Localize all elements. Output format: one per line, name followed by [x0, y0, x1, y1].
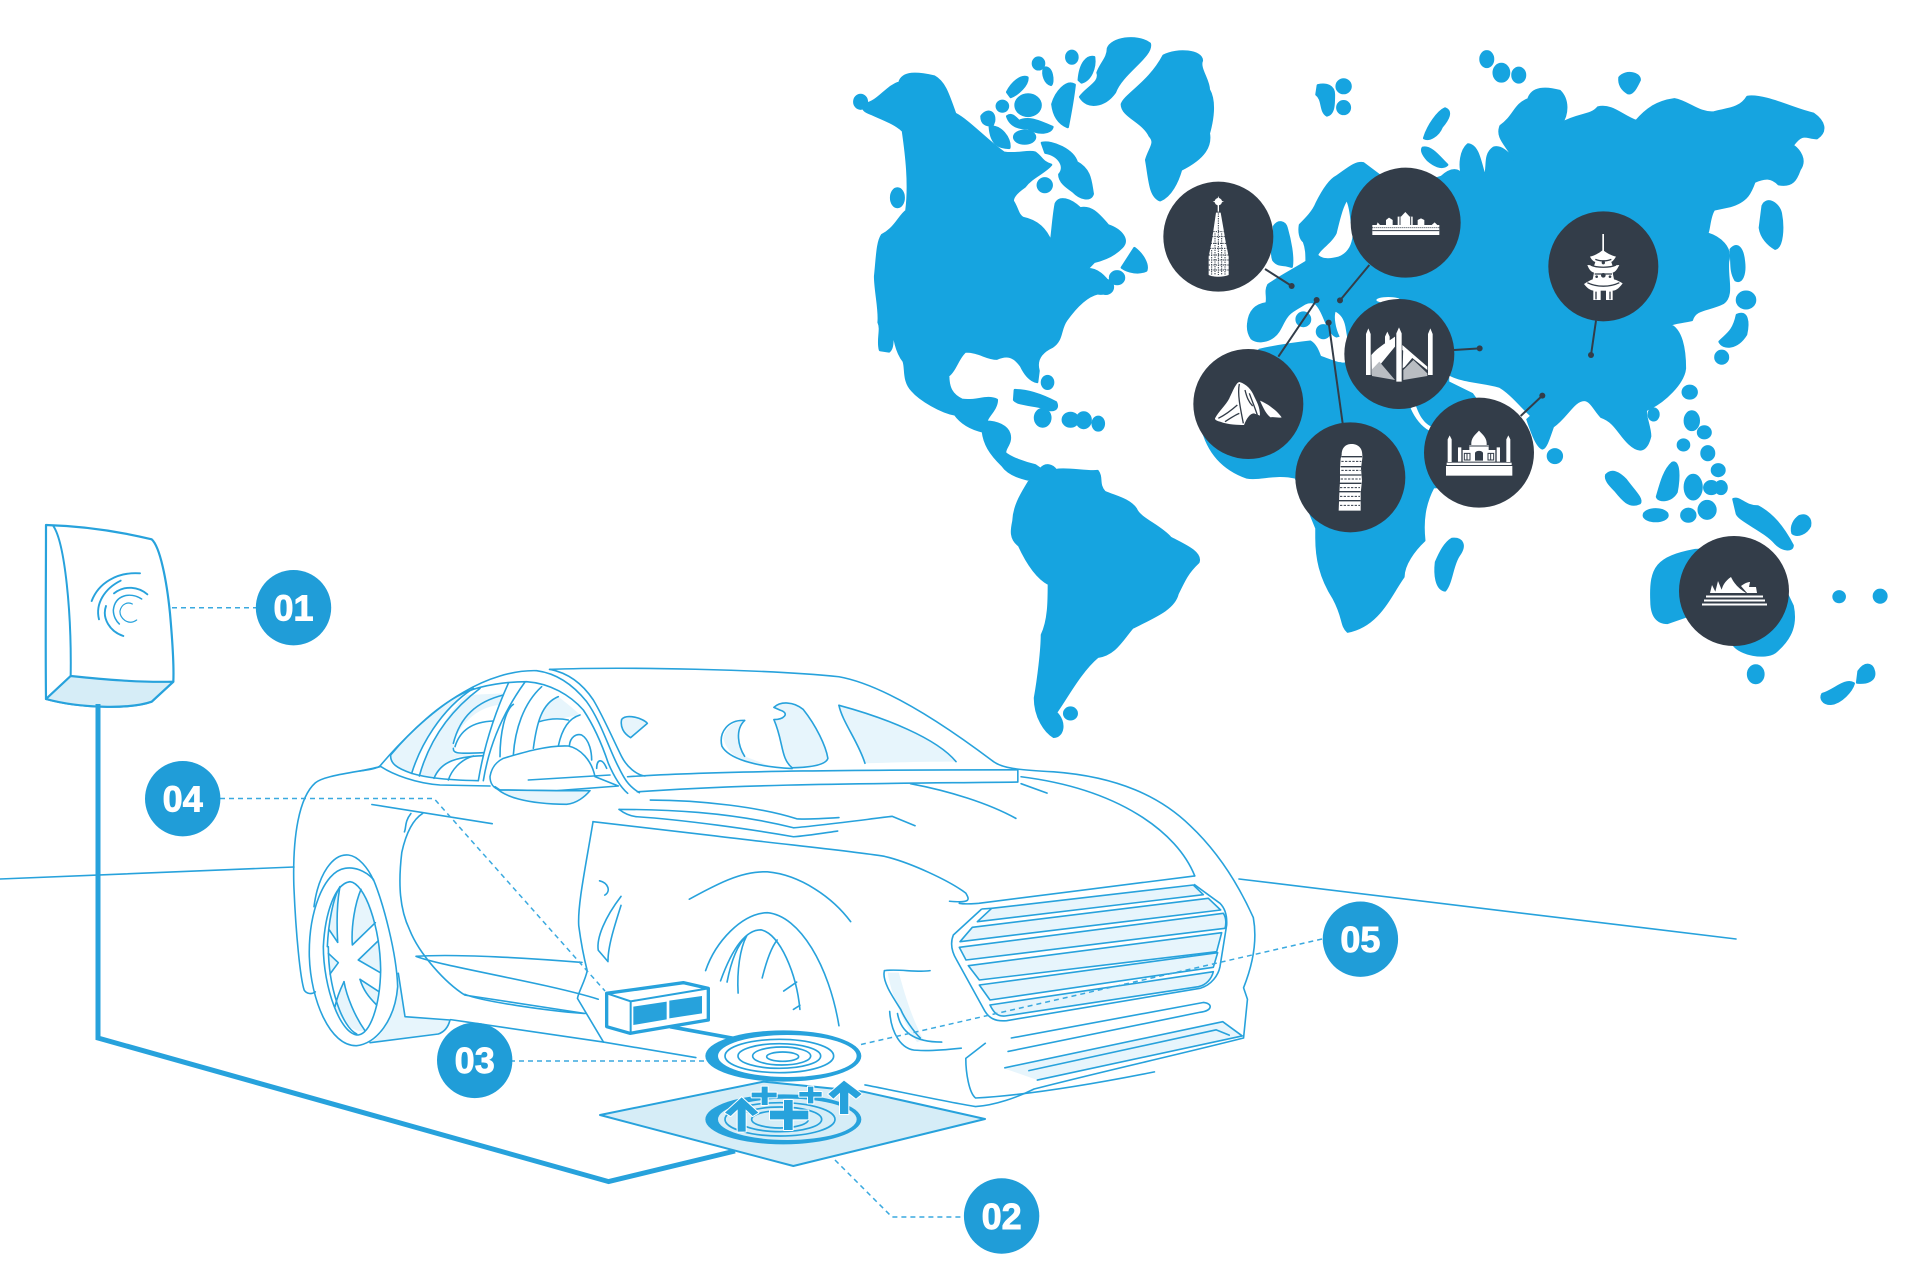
badge 05: 05	[1340, 919, 1380, 960]
signal waves	[92, 573, 147, 636]
badge 01: 01	[273, 588, 314, 628]
upper coil	[705, 1030, 861, 1082]
iceland	[1316, 85, 1334, 115]
mediterranean	[1327, 337, 1350, 363]
receiver box	[607, 983, 708, 1033]
eastern islands	[1424, 109, 1449, 139]
car grille	[952, 884, 1227, 1021]
badge 04: 04	[163, 778, 203, 820]
badge 03: 03	[455, 1040, 495, 1081]
arctic islands	[1033, 58, 1044, 69]
callout dashed leader lines	[172, 608, 1322, 1217]
connector	[670, 1027, 733, 1038]
landmark: leaning tower	[1295, 422, 1405, 532]
badge 01	[256, 570, 331, 645]
pin lines	[1265, 265, 1596, 423]
landmark: pagoda	[1548, 211, 1658, 321]
africa and asia	[1202, 89, 1823, 632]
charging pad	[600, 1082, 985, 1166]
uk	[1272, 222, 1292, 267]
landmark: faisal mosque	[1344, 299, 1454, 409]
landmark: taj mahal	[1424, 398, 1534, 508]
receiver, coils and charging pad	[600, 983, 985, 1166]
car	[294, 668, 1255, 1107]
charging cable	[98, 704, 735, 1182]
landmark: sydney opera house	[1679, 536, 1789, 646]
lower coil	[705, 1094, 861, 1144]
asian seas	[1449, 376, 1530, 448]
badge 02: 02	[982, 1196, 1022, 1237]
black sea	[1376, 297, 1400, 303]
caribbean	[1014, 390, 1057, 410]
car windows and mirror	[360, 669, 647, 804]
world map	[854, 38, 1886, 737]
arrows and plus signs	[725, 1081, 862, 1132]
landmark: parliament	[1351, 168, 1461, 278]
car light fills	[723, 703, 1242, 1080]
north and south america	[863, 74, 1199, 737]
badge 02	[964, 1178, 1039, 1254]
badge 03	[437, 1023, 512, 1098]
car rear wheel	[309, 855, 450, 1046]
madagascar	[1436, 539, 1463, 590]
baltic sea	[1318, 202, 1353, 258]
landmark: spire tower	[1163, 182, 1273, 292]
badge 05	[1323, 902, 1398, 977]
car outline lines	[294, 668, 1255, 1107]
wall charger	[46, 525, 174, 707]
australia	[1651, 548, 1794, 655]
europe	[1248, 163, 1403, 347]
badge 04	[145, 761, 220, 836]
greenland	[1122, 52, 1213, 200]
red sea	[1411, 405, 1432, 431]
street lines	[0, 867, 1736, 939]
landmark: matterhorn	[1193, 349, 1303, 459]
